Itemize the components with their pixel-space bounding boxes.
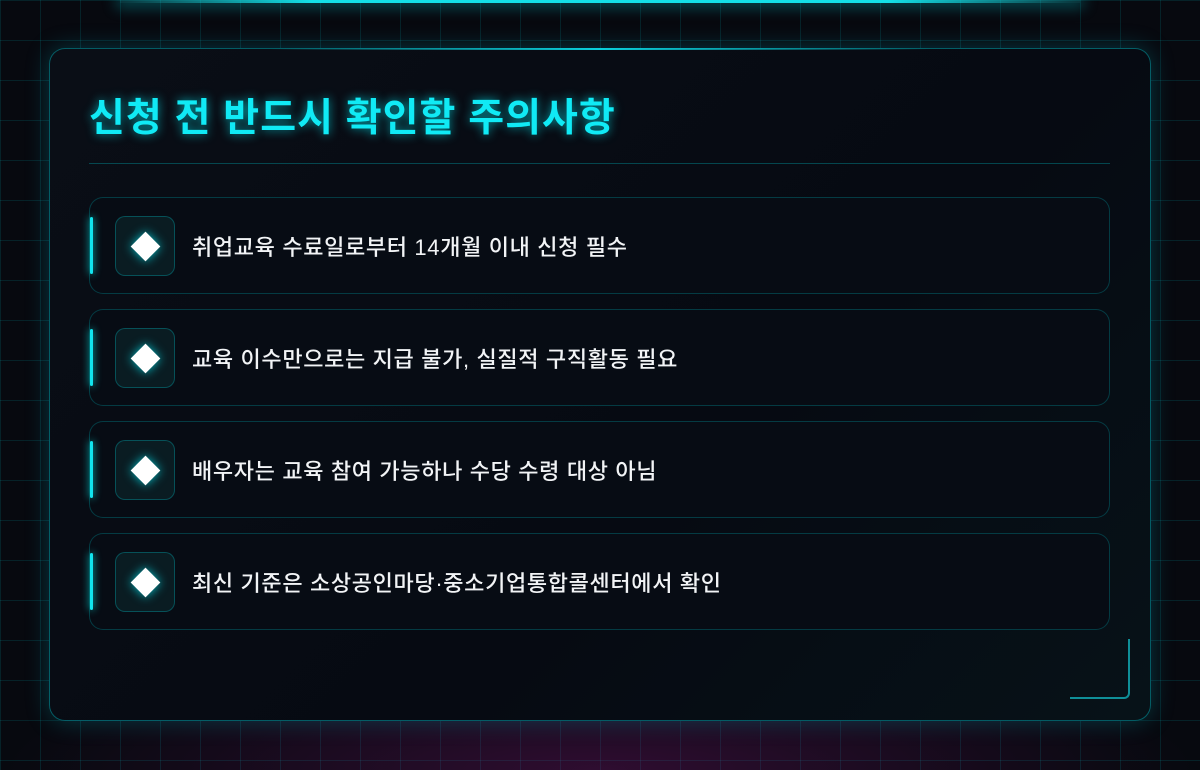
text 3: 배우자는 교육 참여 가능하나 수당 수령 대상 아님 [192, 459, 657, 484]
icon: diamond [115, 216, 175, 276]
icon: diamond [115, 552, 175, 612]
item 2 [89, 309, 1110, 406]
top glow bar [120, 0, 1080, 3]
text 2: 교육 이수만으로는 지급 불가, 실질적 구직활동 필요 [192, 347, 678, 372]
text 4: 최신 기준은 소상공인마당·중소기업통합콜센터에서 확인 [192, 571, 722, 596]
item 1 [89, 197, 1110, 294]
corner bracket [1070, 639, 1130, 699]
icon: diamond [115, 328, 175, 388]
icon: diamond [115, 440, 175, 500]
title: 신청 전 반드시 확인할 주의사항 [89, 97, 616, 140]
item 4 [89, 533, 1110, 630]
item 3 [89, 421, 1110, 518]
text 1: 취업교육 수료일로부터 14개월 이내 신청 필수 [192, 235, 628, 260]
